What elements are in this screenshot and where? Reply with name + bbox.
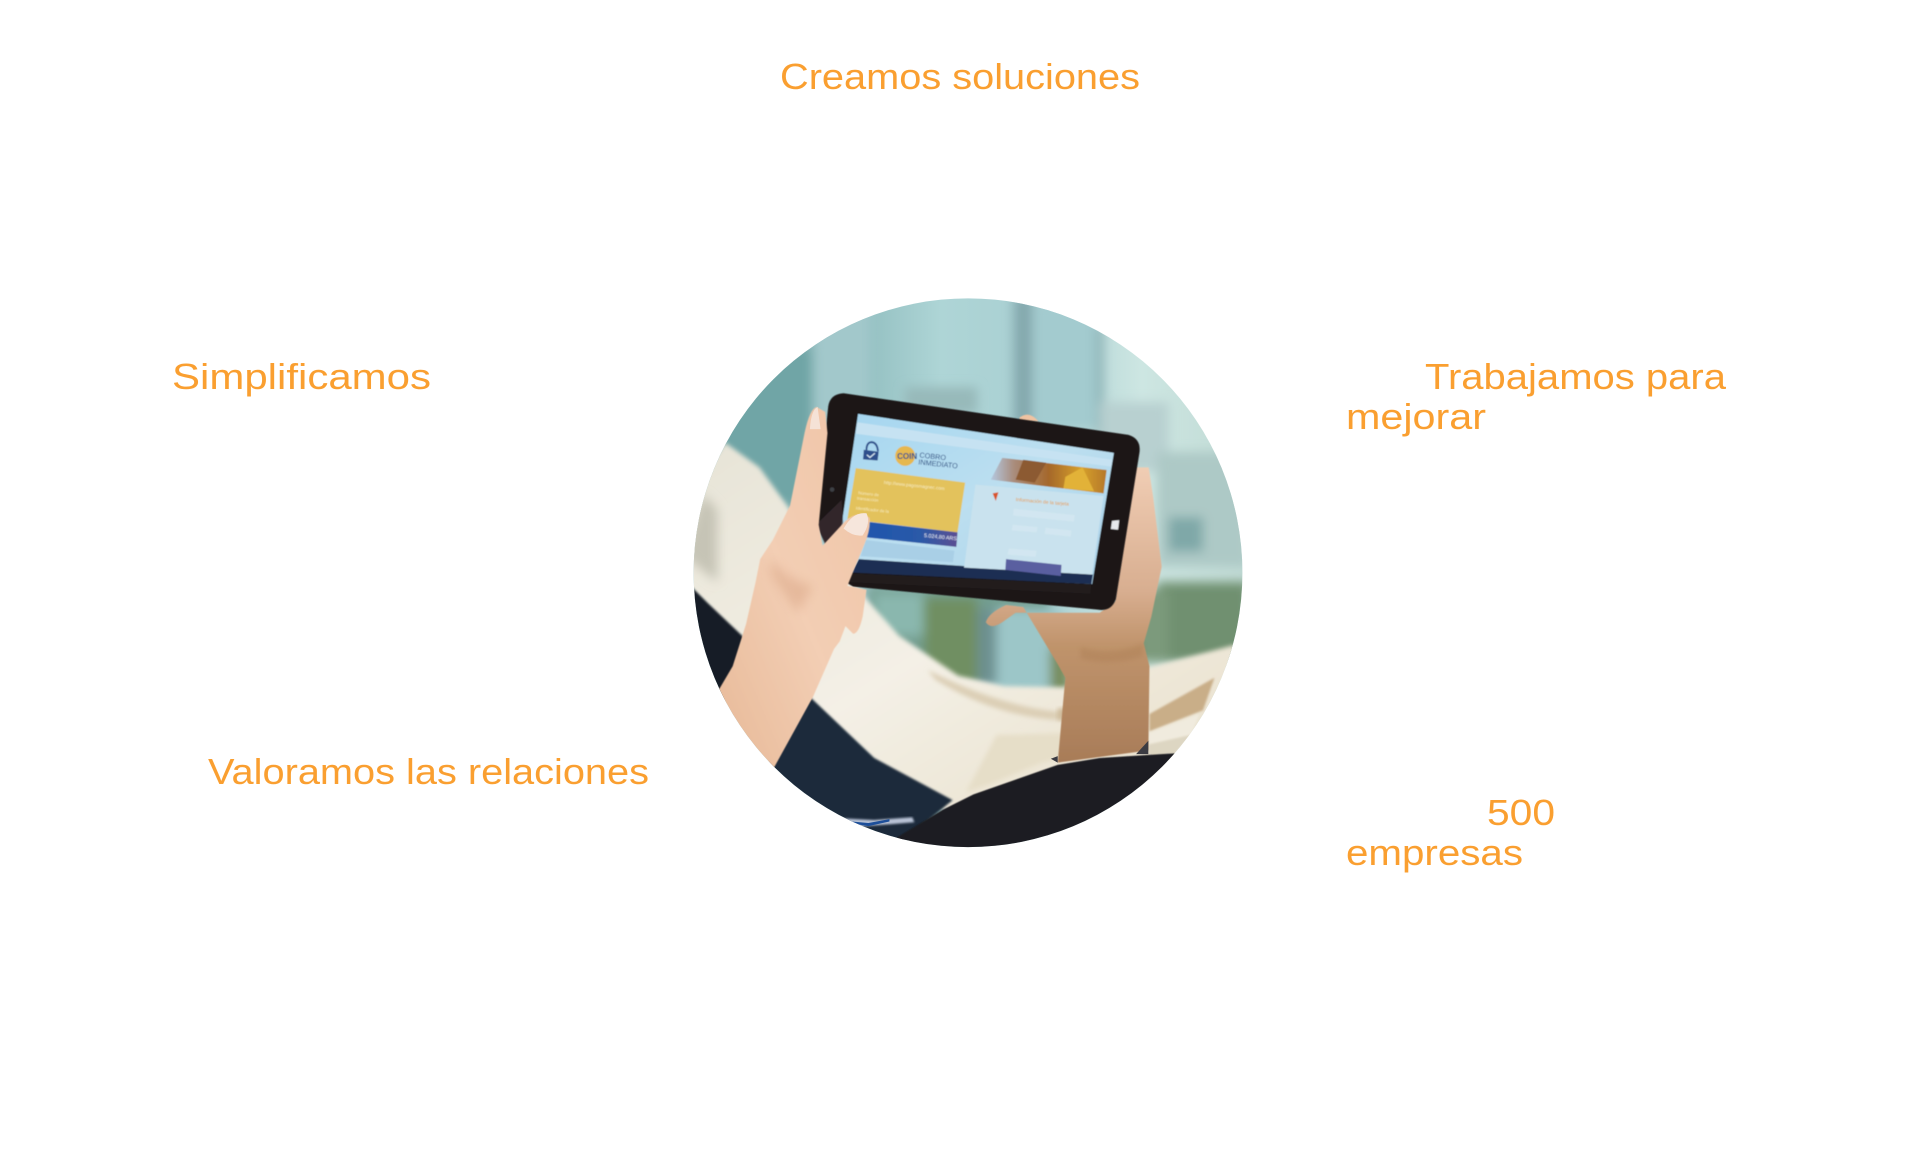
yellow payment card: http://www.pagosmagnec.com <box>884 480 945 491</box>
coin logo: COIN <box>897 452 917 461</box>
browser bar <box>856 422 1112 467</box>
dark clothing: legs <box>675 571 953 861</box>
blue total band: 5.024,80 ARS <box>924 533 958 542</box>
coin logo: INMEDIATO <box>918 457 959 470</box>
hammock fabric <box>694 441 1233 810</box>
blue total band <box>863 522 958 547</box>
heading: Simplificamos: Simplificamos <box>172 356 431 397</box>
pay button <box>1005 559 1062 576</box>
camera dot <box>830 487 834 492</box>
reflection on bezel <box>818 500 844 544</box>
yellow payment card: Número de <box>858 490 880 497</box>
heading: Trabajamos para mejorar: mejorar <box>1346 396 1486 437</box>
taskbar <box>851 559 1093 584</box>
coin logo: COBRO <box>919 450 947 462</box>
circular photo: hands holding tablet <box>694 298 1242 848</box>
blurred window background <box>683 288 1257 861</box>
tablet device <box>816 393 1140 610</box>
coin logo <box>895 446 959 470</box>
windows logo <box>1111 520 1119 530</box>
lock icon <box>863 442 879 460</box>
left hand and forearm <box>714 407 870 773</box>
right form panel: Información de la tarjeta <box>1015 497 1069 508</box>
gold banner <box>991 458 1107 493</box>
heading: 500 empresas: empresas <box>1346 832 1523 873</box>
heading: Trabajamos para mejorar <box>1346 356 1727 437</box>
yellow payment card: Identificador de la <box>856 505 890 514</box>
black sweater <box>896 752 1175 848</box>
heading: Trabajamos para mejorar: Trabajamos para <box>1425 356 1727 397</box>
heading: 500 empresas <box>1346 792 1555 873</box>
index nail <box>810 407 821 429</box>
thumbnail <box>844 513 868 536</box>
right hand and forearm <box>986 415 1162 763</box>
heading: 500 empresas: 500 <box>1487 792 1555 833</box>
right form panel <box>964 485 1104 576</box>
infographic canvas <box>174 63 1726 872</box>
heading: Valoramos las relaciones: Valoramos las relaciones <box>208 751 649 792</box>
caption under card <box>861 540 954 562</box>
taskbar lower bezel reflection <box>849 574 1091 594</box>
tablet screen <box>842 414 1114 584</box>
tablet body <box>816 393 1140 610</box>
heading: Creamos soluciones: Creamos soluciones <box>780 56 1140 97</box>
yellow payment card <box>847 468 965 532</box>
hand shading <box>770 564 811 610</box>
yellow payment card: transacción <box>857 496 879 503</box>
